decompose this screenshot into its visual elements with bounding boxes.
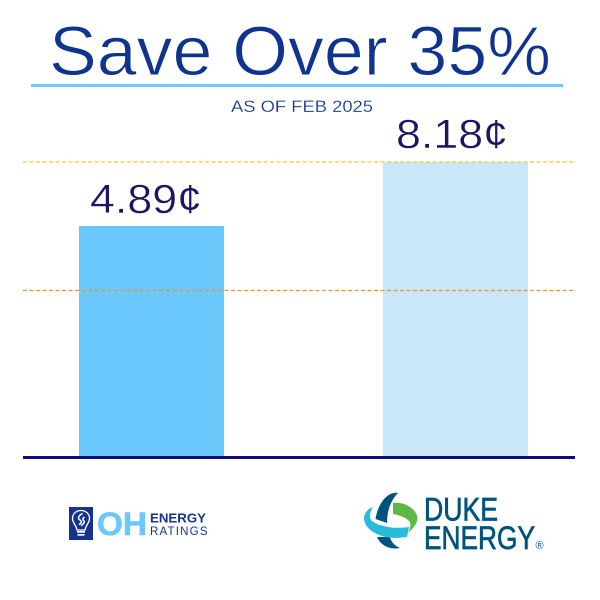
logo wordmark: ENERGY: ENERGY	[150, 512, 207, 526]
icon: Duke Energy swirl	[364, 493, 418, 549]
logo registered mark: ®	[536, 540, 544, 552]
logo wordmark: OH: OH	[97, 506, 147, 542]
logo: OH Energy Ratings	[69, 506, 208, 542]
logo wordmark: RATINGS: RATINGS	[150, 526, 208, 538]
logo wordmark: ENERGY: ENERGY	[424, 520, 535, 556]
title underline	[31, 84, 563, 87]
value label: 8.18 cents: 8.18¢	[396, 111, 508, 157]
title: Save Over 35%	[49, 12, 551, 90]
logo: Duke Energy	[364, 492, 544, 556]
logo wordmark: DUKE: DUKE	[424, 492, 498, 528]
icon: light bulb	[69, 507, 93, 540]
subtitle: AS OF FEB 2025	[231, 98, 373, 116]
value label: 4.89 cents: 4.89¢	[90, 176, 202, 222]
bar: Duke Energy	[383, 162, 528, 457]
baseline axis	[23, 456, 575, 459]
bar: OH Energy Ratings	[79, 226, 224, 457]
